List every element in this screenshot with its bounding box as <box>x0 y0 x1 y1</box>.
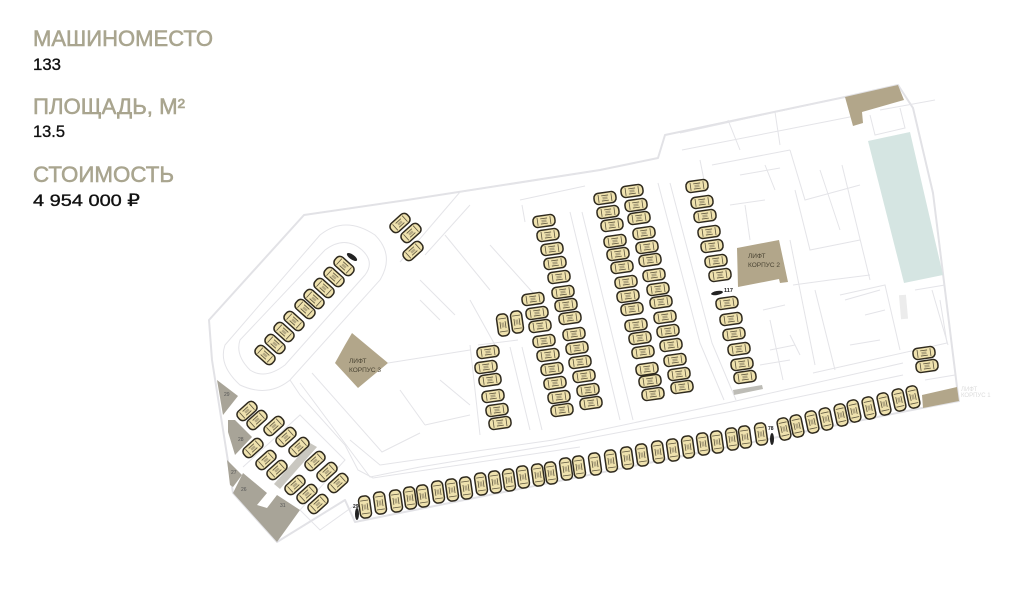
storage rooms: gray units <box>217 380 763 542</box>
tan zone: top right <box>845 85 904 126</box>
parking: left small column <box>474 310 524 430</box>
lift block: building 2 <box>737 240 788 287</box>
parking: column five <box>620 184 694 394</box>
motorcycle space 78: 78 <box>768 426 774 432</box>
lift block: building 2: ЛИФТ <box>748 253 766 260</box>
parking: column four <box>593 191 665 401</box>
value: space number: 133 <box>33 55 61 74</box>
storage rooms: gray units: 29 <box>224 392 230 398</box>
parking: top small group <box>388 211 425 263</box>
parking: column six <box>685 179 757 384</box>
parking: right pair <box>912 346 939 373</box>
lift block: building 3: ЛИФТ <box>349 358 367 365</box>
tan zone: bottom right <box>922 387 959 408</box>
motorcycle space 78 <box>768 426 774 445</box>
value: price: 4 954 000 ₽ <box>33 191 140 210</box>
lift block: building 3 <box>335 333 388 388</box>
parking: top left diagonal row <box>253 254 356 367</box>
label: lift building 1: КОРПУС 1 <box>961 393 991 399</box>
heading: price: СТОИМОСТЬ <box>33 162 174 187</box>
lift block: building 3: КОРПУС 3 <box>349 367 381 374</box>
pool area <box>868 132 943 283</box>
parking: long bottom row <box>358 385 921 519</box>
storage rooms: gray units: 28 <box>238 437 244 443</box>
value: area: 13.5 <box>33 122 65 141</box>
heading: parking space: МАШИНОМЕСТО <box>33 26 213 51</box>
storage rooms: gray units: 31 <box>280 503 286 509</box>
motorcycle space 29 <box>353 504 359 520</box>
parking: column two <box>521 292 574 417</box>
label: lift building 1: ЛИФТ <box>961 387 977 393</box>
icon: motorcycle top left <box>346 252 358 262</box>
floor plan: outer perimeter <box>209 85 959 542</box>
info block: parking space details <box>33 26 213 210</box>
parking: column three <box>532 214 603 410</box>
motorcycle space 117: 117 <box>724 288 733 294</box>
lift block: building 2: КОРПУС 2 <box>748 262 780 269</box>
motorcycle space 29: 29 <box>353 504 359 510</box>
storage rooms: gray units: 26 <box>241 487 247 493</box>
parking: bottom left diagonal cluster <box>235 399 350 516</box>
heading: area: ПЛОЩАДЬ, М² <box>33 94 185 119</box>
floor plan: interior walls and roads <box>223 97 955 530</box>
motorcycle space 117 <box>711 288 733 296</box>
storage rooms: gray units: 27 <box>231 470 237 476</box>
grid panel <box>899 295 908 319</box>
